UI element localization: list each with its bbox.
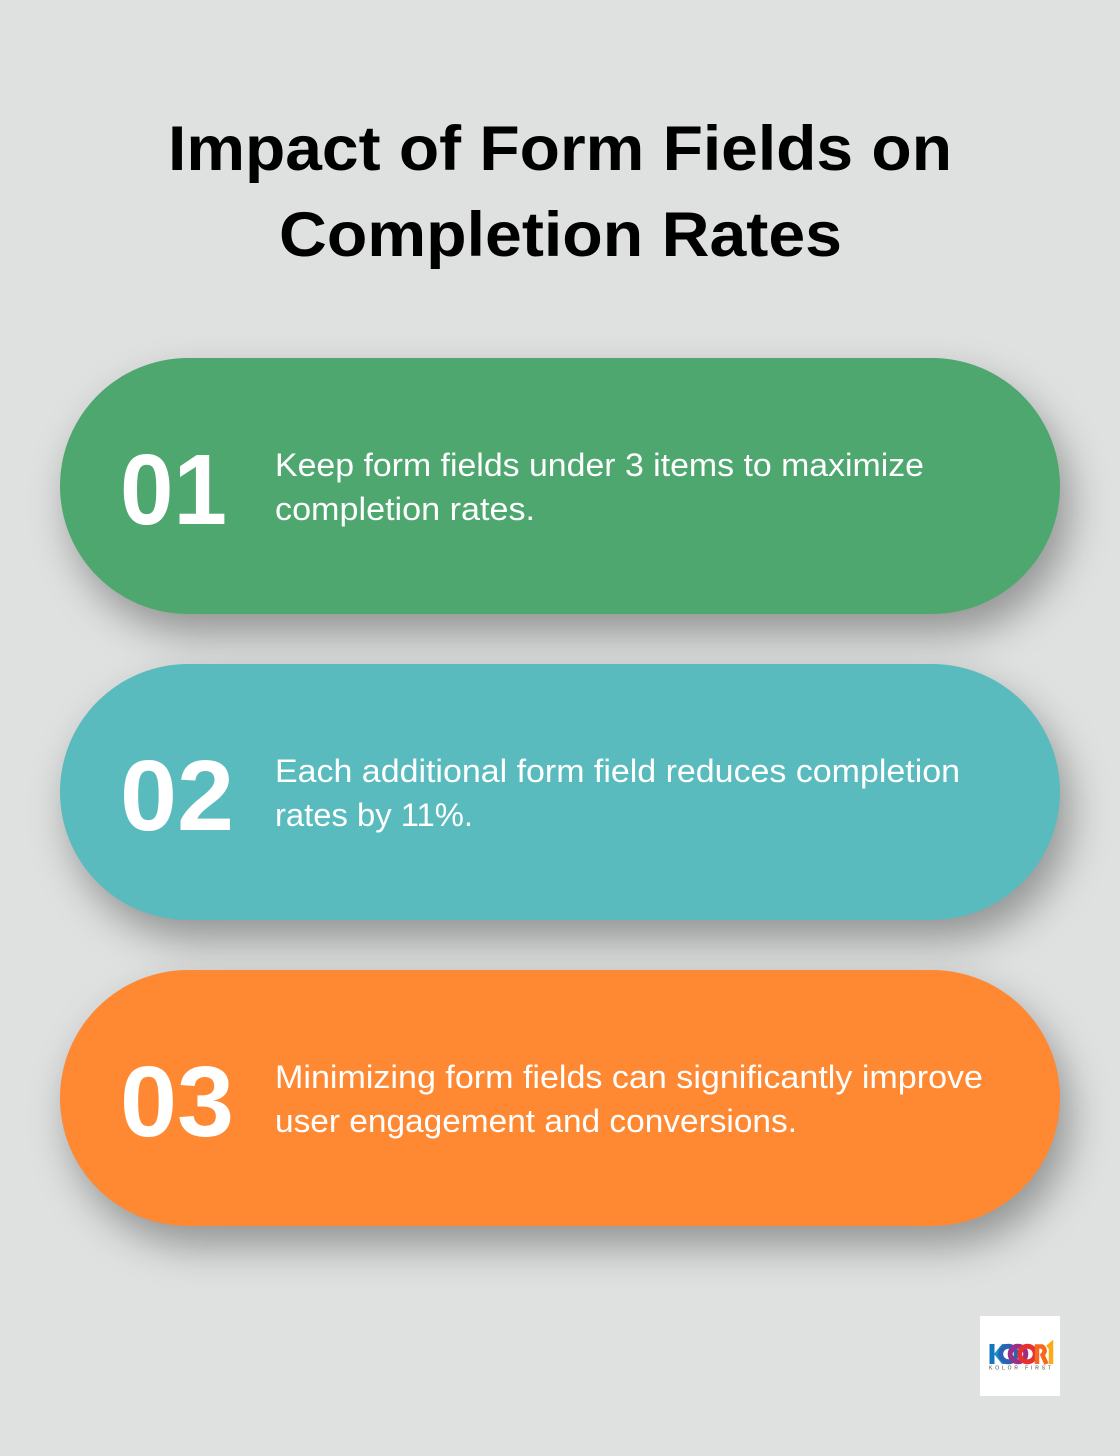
text: step 02 description: rates by 11%.	[275, 797, 473, 833]
number 02: 02	[120, 740, 234, 852]
logo: Koori Kolor First	[980, 1316, 1060, 1396]
text: step 03 description	[275, 1059, 983, 1139]
panel: step 02	[60, 664, 1060, 920]
number 03: 03	[120, 1046, 234, 1158]
text: step 01 description: Keep form fields under 3 items to maximize	[275, 447, 924, 483]
panel: step 01	[60, 358, 1060, 614]
text: step 02 description	[275, 753, 960, 833]
number 01: 01	[120, 434, 227, 546]
text: step 02 description: Each additional form field reduces completion	[275, 753, 960, 789]
title	[168, 114, 952, 270]
text: step 03 description: user engagement and conversions.	[275, 1103, 797, 1139]
title: Impact of Form Fields on	[168, 114, 952, 184]
text: step 01 description: completion rates.	[275, 491, 535, 527]
logo tagline: KOLOR FIRST	[989, 1366, 1051, 1372]
text: step 03 description: Minimizing form fields can significantly improve	[275, 1059, 983, 1095]
panel: step 03	[60, 970, 1060, 1226]
text: step 01 description	[275, 447, 924, 527]
title: Completion Rates	[279, 200, 842, 270]
